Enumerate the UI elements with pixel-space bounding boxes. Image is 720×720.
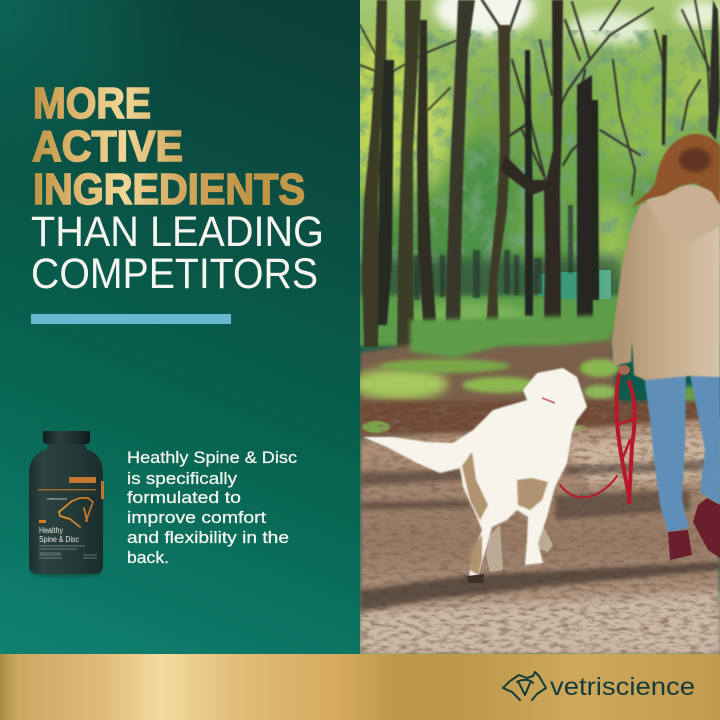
hand bbox=[618, 365, 630, 375]
tree trunks bbox=[362, 0, 720, 361]
white headline lines: COMPETITORS bbox=[31, 250, 318, 298]
body copy: and flexibility in the bbox=[127, 528, 289, 547]
product bottle bbox=[29, 431, 104, 577]
curly hair bbox=[632, 134, 720, 207]
forest background bbox=[346, 0, 720, 346]
headline bbox=[31, 80, 324, 298]
distant thin trunks bbox=[414, 205, 573, 300]
body copy: is specifically bbox=[127, 469, 238, 488]
orange side tab bbox=[101, 481, 104, 499]
dog far legs bbox=[486, 520, 553, 572]
vetriscience logo bbox=[503, 672, 695, 701]
product tag bbox=[39, 520, 46, 523]
small benefit line bbox=[38, 489, 96, 490]
blue accent bar bbox=[31, 314, 231, 324]
red leash bbox=[560, 372, 636, 502]
body copy: back. bbox=[127, 548, 169, 567]
dog collar bbox=[542, 398, 555, 403]
product name bbox=[39, 526, 79, 544]
orange label tag bbox=[69, 477, 96, 483]
body copy: Heathly Spine & Disc bbox=[127, 448, 298, 467]
bottle cap bbox=[43, 431, 90, 444]
coat hood bbox=[646, 184, 720, 243]
dog bbox=[363, 368, 587, 583]
shoes bbox=[668, 498, 720, 560]
gold headline lines bbox=[32, 80, 305, 214]
gold headline lines: INGREDIENTS bbox=[33, 166, 305, 214]
dog paw bbox=[467, 574, 484, 583]
bottle body bbox=[29, 443, 103, 574]
body copy: improve comfort bbox=[127, 508, 266, 527]
woman bbox=[612, 134, 720, 560]
product name: Healthy bbox=[39, 526, 63, 535]
green fence in background bbox=[538, 270, 611, 299]
dog body bbox=[363, 368, 587, 582]
dog logo mark on bottle bbox=[59, 498, 93, 527]
body copy: formulated to bbox=[127, 488, 241, 507]
jeans bbox=[644, 373, 720, 532]
product fine print bbox=[39, 546, 97, 558]
gold headline lines: MORE bbox=[33, 80, 151, 128]
gold footer band bbox=[0, 654, 720, 720]
product name: Spine & Disc bbox=[39, 535, 79, 544]
body copy bbox=[127, 448, 298, 567]
grass and leaf litter bbox=[352, 315, 720, 440]
logo wordmark: vetriscience bbox=[550, 673, 695, 701]
branches bbox=[360, 0, 710, 195]
bottle shadow bbox=[30, 571, 102, 577]
photo: woman walking dog in forest bbox=[346, 0, 720, 654]
dirt path bbox=[360, 400, 720, 654]
beige coat bbox=[612, 190, 720, 380]
logo dog icon bbox=[503, 672, 546, 700]
dog mud patches bbox=[462, 452, 548, 575]
brand on bottle: vetriscience bbox=[47, 497, 67, 501]
panel: green headline panel bbox=[0, 0, 360, 654]
gold headline lines: ACTIVE bbox=[32, 123, 183, 171]
white headline lines: THAN LEADING bbox=[31, 208, 324, 256]
white headline lines bbox=[31, 208, 324, 298]
